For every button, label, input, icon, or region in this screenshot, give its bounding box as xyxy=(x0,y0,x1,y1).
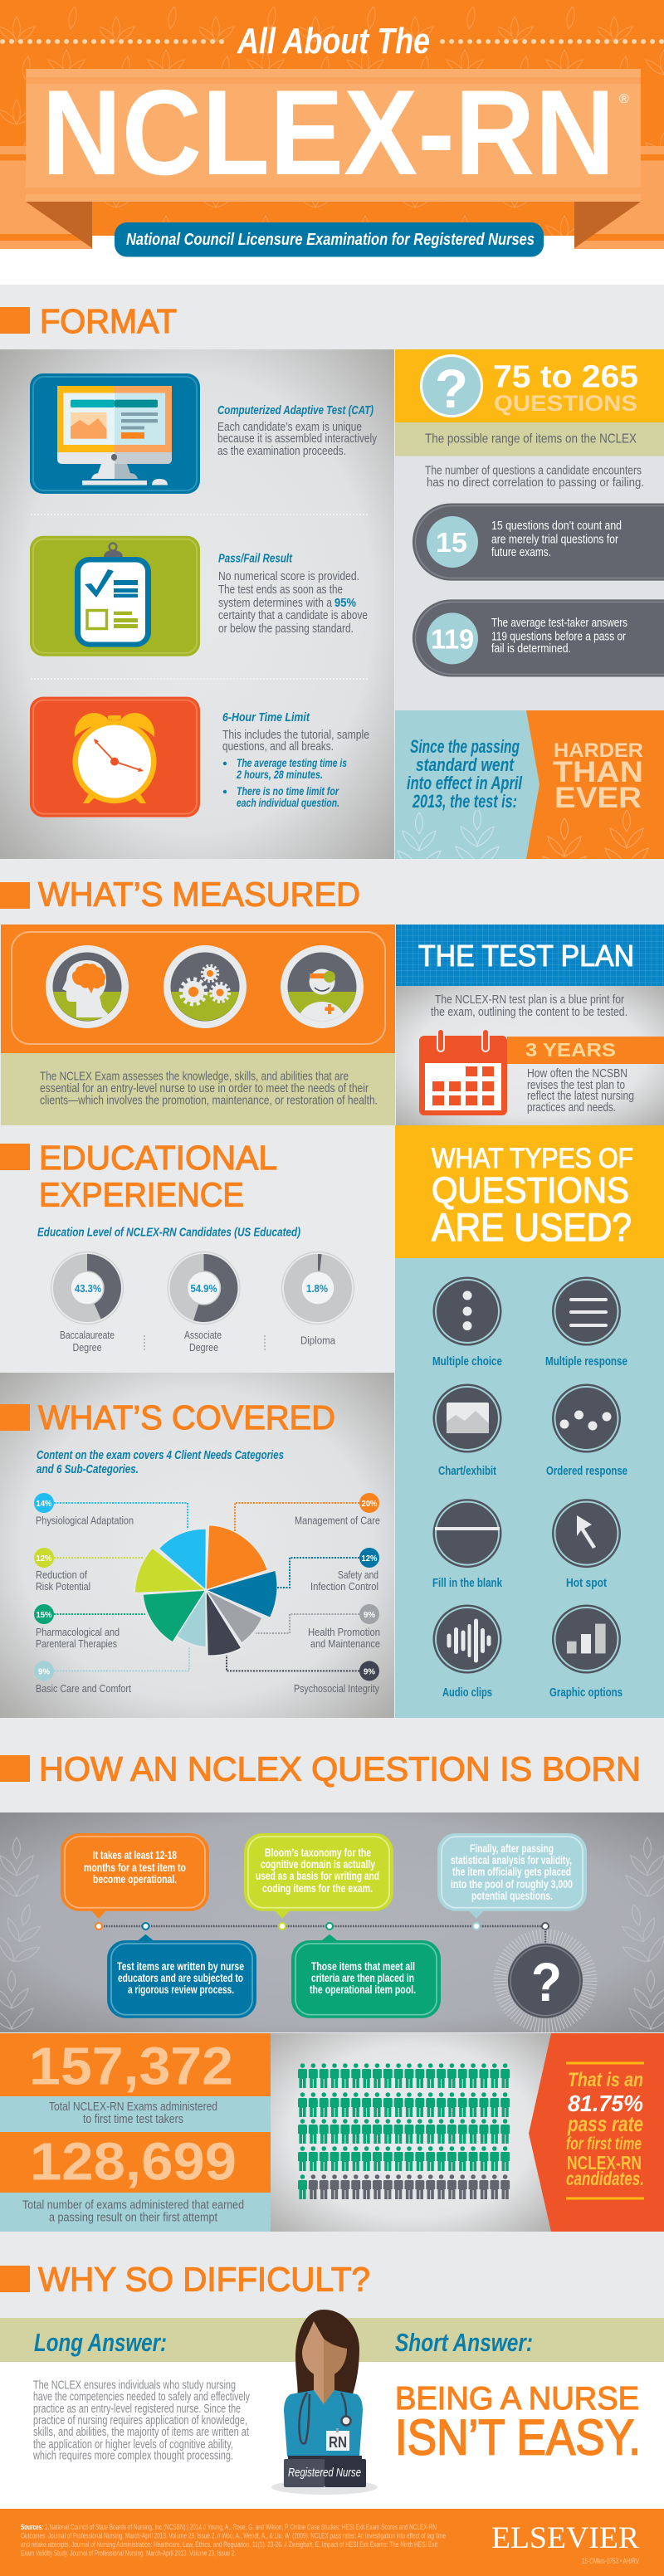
panel: format left xyxy=(0,349,394,859)
text: how often: How often the NCSBN xyxy=(527,1067,627,1081)
label: health promotion xyxy=(308,1604,380,1650)
panel: what's covered xyxy=(0,1373,394,1718)
text: blue print: The NCLEX-RN test plan is a blue print for xyxy=(435,993,624,1007)
stat: 157,372 xyxy=(0,2033,271,2132)
text: time limit: 6-Hour Time Limit xyxy=(222,710,310,724)
icon: nurse xyxy=(281,945,364,1028)
text: CAT: Each candidate’s exam is unique xyxy=(217,421,362,434)
bubble: finally: the item officially gets placed xyxy=(452,1865,571,1878)
callout: 75 to 265 xyxy=(395,349,664,422)
heading: short answer: Short Answer: xyxy=(395,2328,533,2357)
text: how often: reflect the latest nursing xyxy=(527,1090,634,1103)
bubble: bloom's taxonomy: coding items for the exam. xyxy=(262,1881,373,1895)
text: long answer: which requires more complex thought processing. xyxy=(32,2450,233,2463)
heading: what types of questions xyxy=(395,1125,664,1258)
icon: graphic options: Graphic options xyxy=(549,1686,622,1700)
text: categories xyxy=(37,1448,284,1476)
callout: 15 xyxy=(413,503,664,581)
heading: what's covered: WHAT’S COVERED xyxy=(38,1398,335,1437)
header xyxy=(0,0,664,257)
donut: baccalaureate: Degree xyxy=(73,1341,101,1354)
icon: head xyxy=(46,945,129,1028)
stat: 128,699 xyxy=(0,2132,271,2232)
icon: calendar xyxy=(419,1029,507,1115)
label: psychosocial xyxy=(294,1661,379,1695)
label: health promotion: 9% xyxy=(364,1611,375,1620)
panel: question timeline xyxy=(0,1812,664,2032)
panel: pass statistics xyxy=(0,2033,664,2232)
donut: baccalaureate xyxy=(51,1251,123,1354)
icon: ordered response: Ordered response xyxy=(546,1465,627,1478)
label: safety xyxy=(310,1548,379,1593)
heading: educational experience: EDUCATIONAL xyxy=(39,1139,277,1177)
bubble: those items: criteria are then placed in xyxy=(311,1971,414,1984)
sources: Sources: 1.National Council of State Boards of Nursing, Inc (NCSBN) | 2014 // Young, A., Rose, G. and Wilson, P. Online Case Studies: HESI Exit Exam Scores and NCLEX-RN xyxy=(21,2523,437,2532)
text: long answer: the application or higher levels of cognitive ability, xyxy=(33,2438,233,2452)
icon: hot spot: Hot spot xyxy=(566,1577,607,1590)
donut: baccalaureate: 43.3% xyxy=(75,1282,101,1295)
chart: people xyxy=(271,2033,553,2232)
band: 3 years: 3 YEARS xyxy=(525,1039,616,1061)
donut: diploma: Diploma xyxy=(300,1334,336,1346)
label: health promotion: and Maintenance xyxy=(310,1637,380,1650)
bubble: finally: potential questions. xyxy=(471,1889,553,1902)
text: time limit: There is no time limit for xyxy=(237,785,339,798)
text: blue print xyxy=(431,993,627,1019)
podium: Registered Nurse xyxy=(288,2466,361,2480)
label: pharmacological: Parenteral Therapies xyxy=(36,1637,117,1650)
callout: 15: are merely trial questions for xyxy=(491,534,618,547)
text: CAT: Computerized Adaptive Test (CAT) xyxy=(217,403,374,417)
band: answers xyxy=(0,2318,664,2362)
heading: why so difficult: WHY SO DIFFICULT? xyxy=(38,2261,370,2299)
heading: educational experience xyxy=(0,1139,277,1214)
text: pass/fail: No numerical score is provided. xyxy=(218,570,359,583)
donut: diploma xyxy=(282,1251,354,1346)
callout: 119: 119 xyxy=(431,624,474,655)
panel: the test plan xyxy=(396,925,664,1125)
donut: associate xyxy=(168,1251,240,1354)
text: long answer: The NCLEX ensures individuals who study nursing xyxy=(33,2379,236,2393)
sources: Exam Validity Study. Journal of Professional Nursing. March-April 2013. Volume 29, Issue 2. xyxy=(21,2549,236,2559)
label: reduction of risk potential: 12% xyxy=(37,1554,52,1564)
subtitle pill xyxy=(115,222,544,257)
label: management of care: Management of Care xyxy=(295,1515,380,1527)
text: time limit xyxy=(222,710,369,809)
heading: how an nclex question is born: HOW AN NCLEX QUESTION IS BORN xyxy=(39,1750,641,1788)
illustration: nurse xyxy=(271,2310,378,2495)
text: time limit: The average testing time is xyxy=(237,757,347,769)
text: pass/fail: certainty that a candidate is above xyxy=(218,609,368,622)
callout: harder than ever xyxy=(395,710,664,859)
callout: 119: 119 questions before a pass or xyxy=(491,630,626,643)
stat: 157,372: Total NCLEX-RN Exams administered xyxy=(49,2100,217,2114)
icon: graphic options xyxy=(549,1605,622,1700)
text: CAT: as the examination proceeds. xyxy=(217,445,346,458)
heading: educational experience: EXPERIENCE xyxy=(39,1176,244,1214)
callout: pass rate xyxy=(529,2033,664,2232)
ribbon side bands xyxy=(0,146,664,249)
callout: harder than ever: HARDER xyxy=(554,739,643,762)
badge: RN: RN xyxy=(329,2434,347,2451)
bubble: those items: Those items that meet all xyxy=(311,1959,415,1973)
label: reduction of risk potential xyxy=(34,1548,90,1593)
text: categories: and 6 Sub-Categories. xyxy=(37,1462,139,1476)
bubble: finally: into the pool of roughly 3,000 xyxy=(451,1877,573,1891)
icon: question burst: ? xyxy=(531,1951,562,2013)
pie chart xyxy=(134,1525,277,1656)
text: pass/fail: Pass/Fail Result xyxy=(218,552,293,566)
label: reduction of risk potential: Risk Potential xyxy=(36,1580,90,1593)
heading: what's measured: WHAT’S MEASURED xyxy=(38,876,360,914)
text: CAT: because it is assembled interactively xyxy=(217,432,378,446)
icon: alarm clock xyxy=(30,697,200,817)
text: being a nurse: BEING A NURSE xyxy=(395,2381,639,2417)
title: All About The: All About The xyxy=(237,21,430,61)
text: pass/fail: 95% xyxy=(334,597,356,610)
icon: fill in the blank: Fill in the blank xyxy=(432,1577,503,1590)
callout: pass rate: 81.75% xyxy=(568,2091,643,2116)
label: safety: Infection Control xyxy=(310,1580,378,1593)
callout: 119 xyxy=(413,599,664,677)
banner: NCLEX-RN xyxy=(42,65,615,200)
stat: 157,372: to first time test takers xyxy=(83,2113,183,2126)
text: time limit: each individual question. xyxy=(237,797,339,809)
text: long answer: practice as an entry-level registered nurse. Since the xyxy=(33,2403,241,2416)
label: psychosocial: Psychosocial Integrity xyxy=(294,1682,379,1695)
subtitle pill: National Council Licensure Examination for Registered Nurses xyxy=(126,231,535,249)
heading: the test plan: THE TEST PLAN xyxy=(418,939,634,973)
icon: ordered response xyxy=(546,1384,627,1478)
icon: chart/exhibit: Chart/exhibit xyxy=(438,1465,496,1478)
podium xyxy=(284,2456,366,2487)
text: time limit: This includes the tutorial, sample xyxy=(222,729,369,742)
donut: baccalaureate: Baccalaureate xyxy=(60,1329,115,1341)
text: how often xyxy=(527,1067,634,1115)
callout: 75 to 265: QUESTIONS xyxy=(494,391,637,416)
callout: 119: The average test-taker answers xyxy=(491,617,627,630)
icon: fill in the blank xyxy=(432,1499,503,1590)
donut: diploma: 1.8% xyxy=(306,1282,328,1295)
bubble: test items: Test items are written by nurse xyxy=(117,1959,244,1973)
bubble: bloom's taxonomy: Bloom’s taxonomy for the xyxy=(265,1846,371,1859)
label: basic care xyxy=(34,1661,131,1695)
bubble: bloom's taxonomy: used as a basis for writing and xyxy=(256,1869,379,1882)
banner: ® xyxy=(619,92,629,106)
donut: associate: 54.9% xyxy=(191,1282,217,1295)
icon: computer xyxy=(30,373,200,494)
heading: what types of questions: ARE USED? xyxy=(432,1205,632,1249)
bubble: finally xyxy=(437,1833,587,1919)
label: safety: 12% xyxy=(362,1554,378,1564)
heading: what types of questions: QUESTIONS xyxy=(432,1170,629,1211)
heading: long answer: Long Answer: xyxy=(34,2328,167,2357)
text: correlation xyxy=(425,464,644,490)
stat: 128,699: Total number of exams administered that earned xyxy=(22,2199,244,2213)
badge: RN xyxy=(326,2428,349,2451)
icon: question burst xyxy=(500,1936,590,2026)
text: time limit: questions, and all breaks. xyxy=(222,740,334,754)
stat: 157,372: 157,372 xyxy=(29,2037,233,2096)
footer xyxy=(0,2509,664,2576)
logo: Elsevier: ELSEVIER xyxy=(491,2521,639,2555)
sources xyxy=(21,2523,446,2559)
bubble: bloom's taxonomy xyxy=(244,1833,393,1919)
text: long answer: skills, and abilities, the majority of items are written at xyxy=(33,2426,249,2439)
callout: harder than ever: THAN xyxy=(553,756,643,788)
text: pass/fail: system determines with a xyxy=(218,597,333,610)
bubble: bloom's taxonomy: cognitive domain is actually xyxy=(261,1857,375,1871)
sources: and retake attempts. Journal of Nursing Administration: Healthcare, Law, Ethics, and Regulation, 11(1). 23-26. // Zweighaft, E. Impact of HESI Exit Exams: The Ninth HESI Exit xyxy=(21,2540,437,2549)
icon: multiple choice: Multiple choice xyxy=(432,1355,502,1368)
donut: associate: Degree xyxy=(189,1341,218,1354)
heading: what types of questions: WHAT TYPES OF xyxy=(432,1143,633,1174)
icon: hot spot xyxy=(552,1499,621,1590)
callout: pass rate: NCLEX-RN xyxy=(567,2152,642,2174)
band: possible range xyxy=(395,422,664,456)
text: measured description: The NCLEX Exam assesses the knowledge, skills, and abilities that are xyxy=(40,1071,349,1084)
label: physiological adaptation: Physiological Adaptation xyxy=(36,1515,134,1527)
bubble: those items: the operational item pool. xyxy=(310,1983,416,1996)
callout: 119: fail is determined. xyxy=(491,642,571,656)
label: reduction of risk potential: Reduction of xyxy=(36,1569,87,1581)
label: physiological adaptation: 14% xyxy=(37,1500,52,1509)
text: blue print: the exam, outlining the content to be tested. xyxy=(431,1006,627,1019)
text: measured description xyxy=(1,1053,395,1125)
chart: education level xyxy=(37,1225,354,1354)
donut: associate: Associate xyxy=(184,1329,222,1341)
text: pass/fail: or below the passing standard. xyxy=(218,622,354,636)
icon: multiple response xyxy=(545,1276,627,1368)
icon: gears xyxy=(164,945,247,1028)
callout: 15: 15 xyxy=(436,527,467,558)
icon: chart/exhibit xyxy=(433,1384,501,1478)
text: how often: revises the test plan to xyxy=(527,1079,625,1092)
text: time limit: 2 hours, 28 minutes. xyxy=(236,768,323,781)
chart: education level: Education Level of NCLEX-RN Candidates (US Educated) xyxy=(37,1225,300,1239)
text: being a nurse xyxy=(395,2381,641,2466)
callout: pass rate: That is an xyxy=(568,2069,643,2091)
panel: format right xyxy=(395,349,664,877)
text: pass/fail xyxy=(218,552,368,636)
leader lines xyxy=(54,1503,359,1671)
icon: audio clips xyxy=(433,1605,501,1700)
callout: 15: 15 questions don’t count and xyxy=(491,520,622,533)
bubble: 12-18 months xyxy=(61,1833,209,1919)
stat: 128,699: 128,699 xyxy=(30,2132,237,2192)
bubble: 12-18 months: months for a test item to xyxy=(84,1861,186,1874)
callout: 15: future exams. xyxy=(491,546,551,559)
label: pharmacological: 15% xyxy=(37,1611,52,1620)
callout: harder than ever: standard went xyxy=(416,754,515,775)
callout: 75 to 265: 75 to 265 xyxy=(493,360,638,395)
label: pharmacological xyxy=(34,1604,120,1650)
label: physiological adaptation xyxy=(34,1493,134,1527)
sources: Outcomes. Journal of Professional Nursing. March-April 2013. Volume 29, Issue 2. // Woo, A., Wendt, A., & Liu, W. (2009). NCLEX pass rates: An investigation into effect of lag time xyxy=(21,2532,446,2541)
text: measured description: essential for an entry-level nurse to use in order to meet the needs of their xyxy=(40,1082,369,1095)
bubble: finally: statistical analysis for validity, xyxy=(451,1853,572,1866)
icon: multiple response: Multiple response xyxy=(545,1355,627,1368)
text: CAT xyxy=(217,403,378,458)
text: long answer: practice of nursing requires application of knowledge, xyxy=(33,2414,247,2427)
icon: multiple choice xyxy=(432,1276,502,1368)
panel: what's measured xyxy=(1,925,395,1125)
text: correlation: has no direct correlation to passing or failing. xyxy=(427,476,644,490)
bubble: those items xyxy=(291,1934,441,2018)
text: categories: Content on the exam covers 4 Client Needs Categories xyxy=(37,1448,284,1462)
label: basic care: Basic Care and Comfort xyxy=(36,1682,131,1695)
bubble: 12-18 months: become operational. xyxy=(93,1872,177,1886)
bubble: test items: educators and are subjected to xyxy=(118,1971,243,1984)
callout: harder than ever: EVER xyxy=(554,782,642,814)
callout: pass rate: pass rate xyxy=(567,2111,643,2136)
panel: question types xyxy=(395,1125,664,1718)
text: long answer xyxy=(32,2379,251,2463)
label: basic care: 9% xyxy=(38,1667,50,1676)
icon: audio clips: Audio clips xyxy=(442,1686,492,1700)
icon: clipboard xyxy=(30,536,200,656)
label: safety: Safety and xyxy=(338,1569,378,1581)
text: measured description: clients—which involves the promotion, maintenance, or restoration of health. xyxy=(40,1095,378,1108)
callout: harder than ever: Since the passing xyxy=(410,736,520,757)
label: management of care: 20% xyxy=(362,1500,378,1509)
timeline xyxy=(95,1923,549,1944)
label: pharmacological: Pharmacological and xyxy=(36,1626,120,1638)
callout: 75 to 265: ? xyxy=(435,358,468,419)
bubble: test items: a rigorous review process. xyxy=(128,1983,234,1996)
label: health promotion: Health Promotion xyxy=(308,1626,380,1638)
band: 3 years xyxy=(507,1037,664,1064)
stat: 128,699: a passing result on their first attempt xyxy=(49,2212,217,2225)
label: management of care xyxy=(295,1493,380,1527)
text: long answer: have the competencies needed to safely and effectively xyxy=(33,2391,251,2404)
bubble: finally: Finally, after passing xyxy=(470,1842,554,1855)
text: how often: practices and needs. xyxy=(527,1101,616,1115)
text: pass/fail: The test ends as soon as the xyxy=(218,583,343,597)
dotted rule left xyxy=(2,39,228,44)
heading: format: FORMAT xyxy=(40,302,177,340)
callout: harder than ever: 2013, the test is: xyxy=(412,791,517,812)
bubble: 12-18 months: It takes at least 12-18 xyxy=(93,1848,177,1861)
bubble: test items xyxy=(107,1934,256,2018)
label: psychosocial: 9% xyxy=(364,1667,375,1676)
callout: harder than ever: into effect in April xyxy=(407,773,523,793)
